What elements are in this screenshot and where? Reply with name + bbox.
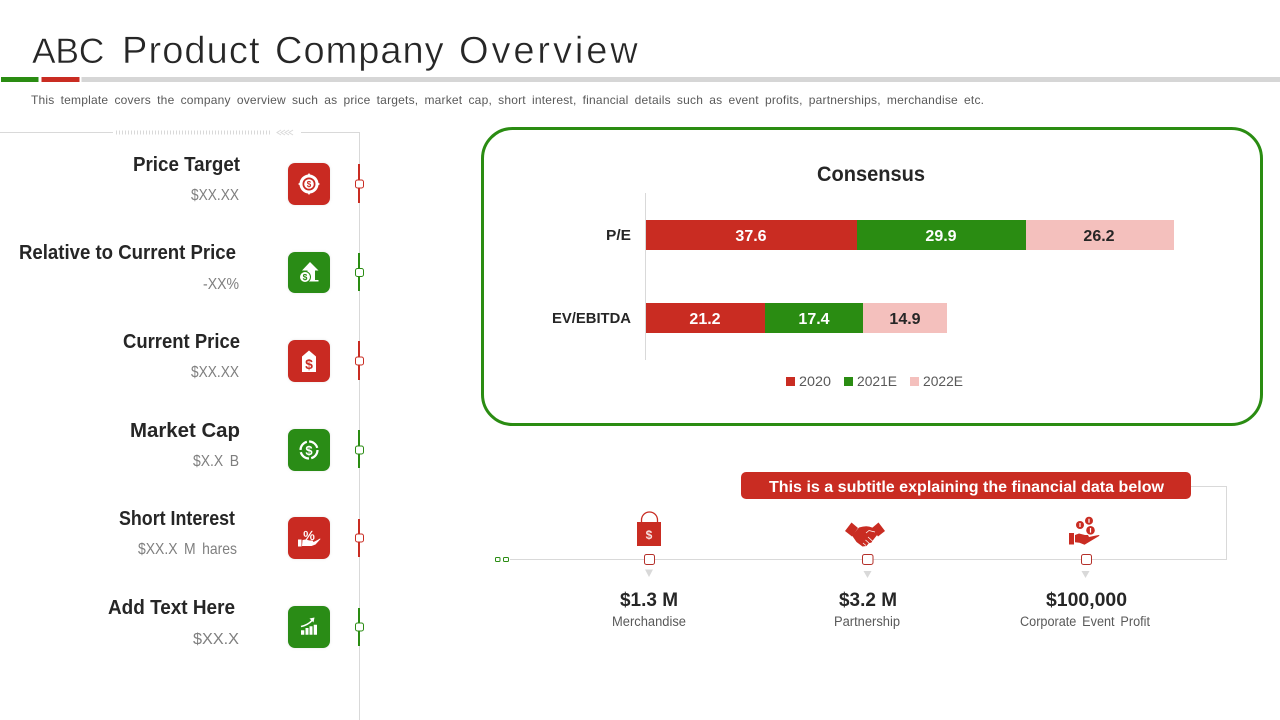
metric: partnership [834,522,900,629]
row: market cap [130,420,364,471]
row: add text here: $XX.X [193,631,239,648]
icon: circular dollar: $ [305,443,313,458]
icon: handshake [845,522,885,546]
subtitle banner [741,472,1191,499]
marker [356,164,364,203]
row: market cap: $X.X B [193,453,239,470]
icon: target: $ [307,180,312,189]
chart title: Consensus [817,163,925,186]
bar: P/E: 26.2 [1083,228,1115,245]
icon: hand with percent: % [303,528,315,543]
title: Product [122,30,261,72]
bar: P/E: P/E [606,227,631,244]
row: current price: $XX.XX [191,364,239,381]
row: add text here: Add Text Here [108,597,235,619]
marker [356,341,364,380]
icon: shopping bag: $ [646,528,653,542]
metric: corporate event profit: $100,000 [1046,589,1127,611]
row: price target: Price Target [133,154,240,176]
icon: hand with coins [1069,517,1100,545]
description text: This template covers the company overview such as price targets, market cap, short interest, financial details such as event profits, partnerships, merchandise etc. [31,93,984,107]
marker [356,253,364,291]
chart legend: 2021E [857,373,897,389]
chart legend [786,373,963,389]
row: add text here [108,597,364,648]
icon: price tag [288,340,330,382]
header rule [1,77,1280,82]
row: short interest [119,508,364,559]
metric: merchandise [612,512,686,629]
subtitle banner: This is a subtitle explaining the financial data below [769,479,1165,496]
row: relative to current price: Relative to Current Price [19,242,236,264]
bar: EV/EBITDA: 17.4 [798,311,830,328]
bar: P/E: 29.9 [925,228,957,245]
row: market cap: Market Cap [130,420,240,442]
bar: P/E: 37.6 [735,228,767,245]
timeline connector [496,486,1226,562]
icon: rising arrow: $ [303,272,308,282]
row: relative to current price [19,242,364,293]
row: relative to current price: -XX% [203,276,239,293]
metric: merchandise: Merchandise [612,614,686,629]
icon: circular dollar [288,429,330,471]
icon: hand with percent [288,517,330,559]
metric: merchandise: $1.3 M [620,589,678,611]
bar: EV/EBITDA: 14.9 [889,311,921,328]
row: short interest: Short Interest [119,508,235,530]
marker [356,519,364,557]
stacked bar chart [552,193,1174,360]
row: current price [123,331,364,382]
left panel frame [0,130,360,720]
bar: P/E [606,220,1174,250]
icon: rising arrow [288,252,330,293]
icon: target [288,163,330,205]
metric: partnership: $3.2 M [839,589,897,611]
bar: EV/EBITDA: 21.2 [689,311,721,328]
row: current price: Current Price [123,331,240,353]
bar: EV/EBITDA [552,303,947,333]
bar: EV/EBITDA: EV/EBITDA [552,310,631,327]
marker [356,608,364,646]
title: ABC [32,31,104,71]
chart legend: 2020 [799,373,831,389]
icon: price tag: $ [305,356,313,372]
marker [356,430,364,468]
metric: corporate event profit [1020,517,1150,629]
metric: corporate event profit: Corporate Event Profit [1020,614,1150,629]
icon: growth bars [288,606,330,648]
row: short interest: $XX.X M hares [138,541,237,558]
row: price target [133,154,364,205]
title: Overview [459,30,641,72]
title: Company [275,30,445,72]
chart legend: 2022E [923,373,963,389]
panel: consensus chart [482,128,1262,424]
row: price target: $XX.XX [191,187,239,204]
metric: partnership: Partnership [834,614,900,629]
